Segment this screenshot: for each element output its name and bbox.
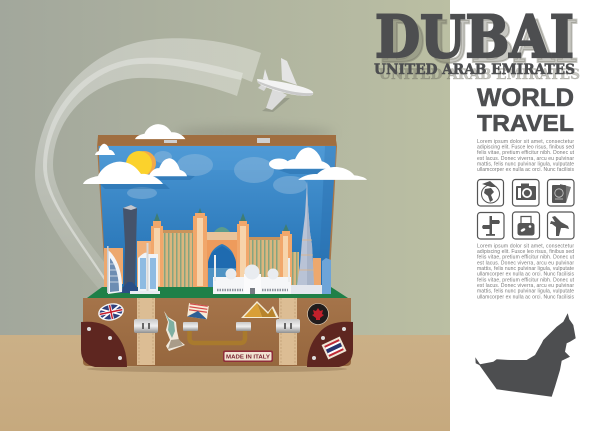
icon: signpost [478, 212, 504, 239]
text block: upper lorem: felis vitae, pretium efficitur nibh. Donec ut [477, 150, 575, 156]
clouds [83, 124, 367, 189]
sticker: maple leaf badge [308, 304, 328, 324]
suitcase shadow on wall [175, 126, 335, 140]
ground inside suitcase [87, 287, 348, 298]
corner caps [81, 322, 353, 367]
arch [205, 232, 238, 288]
text block: lower lorem: mattis, felis nunc pulvinar ligula, vulputate [477, 289, 574, 295]
text block: upper lorem: ullamcorper ex nulla ac orci. Nunc facilisis [477, 167, 574, 173]
sticker: made in italy: MADE IN ITALY [226, 355, 270, 361]
glass towers [130, 243, 160, 294]
sticker: pyramids [241, 301, 279, 318]
text block: lower lorem [477, 244, 575, 300]
icon: globe [478, 180, 504, 206]
icon: camera [512, 180, 539, 206]
lid latches [164, 138, 270, 143]
suitcase base [83, 298, 351, 366]
sky panel [98, 146, 336, 292]
text block: lower lorem: est lacus. Donec viverra, arcu eu pulvinar [477, 260, 574, 266]
straps [137, 298, 297, 365]
text block: upper lorem: mattis, felis nunc pulvinar ligula, vulputate [477, 162, 574, 168]
blue glass block [322, 258, 331, 294]
background pale clouds [127, 151, 307, 199]
heading: world travel [477, 84, 574, 136]
icon: passport [548, 180, 574, 206]
towers [151, 216, 292, 288]
background wall [0, 0, 450, 336]
title: DUBAI: DUBAI [375, 3, 574, 71]
text block: upper lorem: est lacus. Donec viverra, arcu eu pulvinar [477, 156, 574, 162]
locks [134, 319, 300, 333]
floor [0, 335, 450, 431]
Grand Mosque [213, 255, 291, 294]
text block: lower lorem: ullamcorper ex nulla ac orci. Nunc facilisis [477, 272, 574, 278]
subtitle: United Arab Emirates: UNITED ARAB EMIRATES [379, 67, 580, 83]
white side panel [450, 0, 600, 431]
text block: upper lorem [477, 139, 575, 173]
icon: airplane [548, 212, 574, 239]
Atlantis hotel [104, 208, 299, 288]
sticker: statue of liberty [164, 311, 185, 351]
airplane [257, 58, 313, 112]
sun [126, 151, 156, 177]
suitcase lid [97, 135, 337, 292]
text block: upper lorem: adipiscing elit. Fusce leo risus, finibus sed [477, 145, 574, 151]
text block: lower lorem: mattis, felis nunc pulvinar ligula, vulputate [477, 266, 574, 272]
Burj Khalifa [290, 181, 322, 294]
Burj Al Arab [107, 246, 122, 294]
base bottom shadow [87, 366, 347, 372]
subtitle: United Arab Emirates: UNITED ARAB EMIRATES [374, 62, 575, 78]
text block: lower lorem: est lacus. Donec viverra, arcu eu pulvinar [477, 283, 574, 289]
handle [183, 322, 251, 343]
dark tower [117, 205, 143, 293]
text block: lower lorem: felis vitae, pretium efficitur nibh. Donec ut [477, 255, 575, 261]
sticker: rising sun [187, 303, 209, 319]
map of UAE [475, 313, 576, 397]
sticker: Thailand flag [322, 337, 346, 359]
sticker: made in italy [223, 350, 273, 362]
text block: lower lorem: Lorem ipsum dolor sit amet, consectetur [477, 244, 574, 250]
text block: lower lorem: adipiscing elit. Fusce leo risus, finibus sed [477, 249, 574, 255]
heading: world travel: TRAVEL [477, 110, 574, 136]
text block: upper lorem: Lorem ipsum dolor sit amet, consectetur [477, 139, 574, 145]
text block: lower lorem: felis vitae, pretium efficitur nibh. Donec ut [477, 277, 575, 283]
sticker: UK oval [97, 301, 125, 323]
heading: world travel: WORLD [477, 84, 574, 112]
icon: luggage [512, 212, 540, 239]
text block: lower lorem: ullamcorper ex nulla ac orci. Nunc facilisis [477, 294, 574, 300]
contrail [35, 38, 261, 295]
title: DUBAI: DUBAI [380, 8, 579, 76]
